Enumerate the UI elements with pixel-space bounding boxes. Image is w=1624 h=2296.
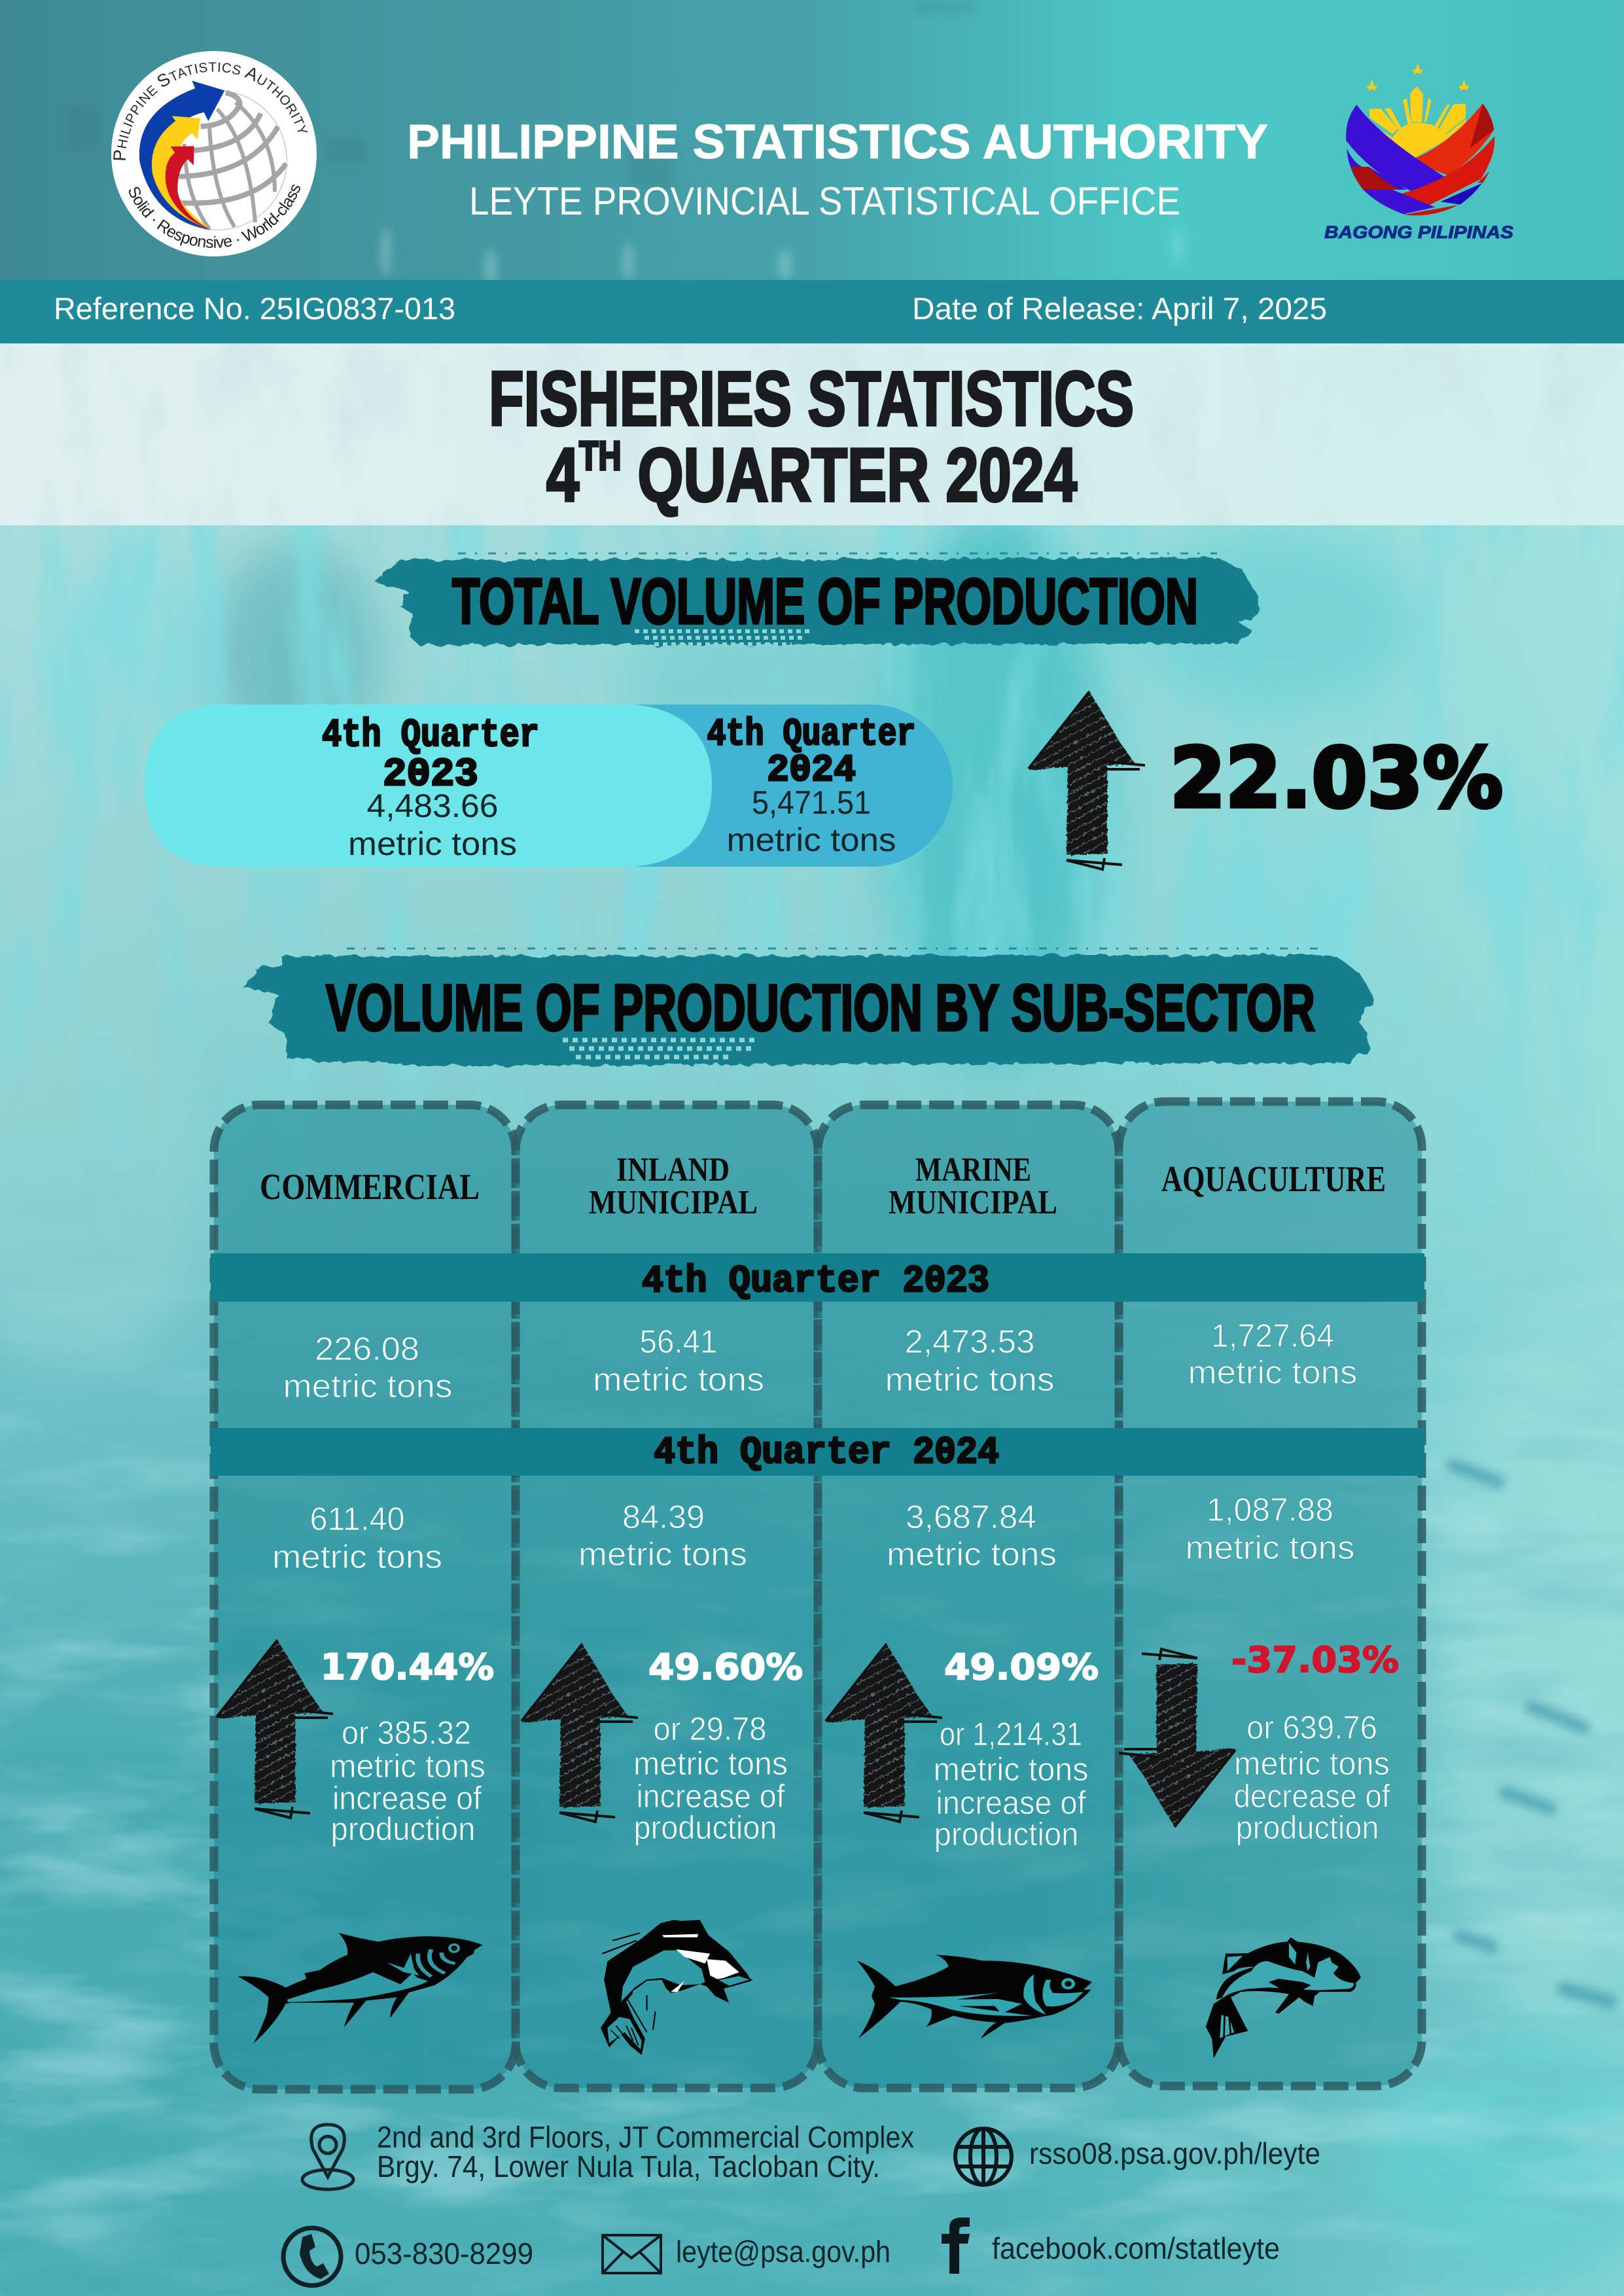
date of release: Date of Release: April 7, 2025	[912, 291, 1327, 326]
4th quarter 2024 value: 4th Quarter	[707, 714, 916, 756]
2024 value	[887, 1499, 1057, 1573]
logo: Philippine Statistics Authority seal: Solid · Responsive · World-class	[129, 184, 300, 248]
facebook address: facebook.com/statleyte	[992, 2231, 1280, 2265]
change description: or 385.32	[342, 1714, 471, 1751]
logo: Bagong Pilipinas	[1324, 63, 1513, 242]
title line 2: 4	[546, 432, 589, 517]
logo: Bagong Pilipinas: BAGONG PILIPINAS	[1324, 222, 1513, 242]
heading: COMMERCIAL	[260, 1167, 480, 1208]
change description: production	[934, 1816, 1078, 1852]
column: marine municipal	[826, 1151, 1099, 2039]
2024 value: metric tons	[578, 1536, 747, 1573]
4th quarter 2024 value	[707, 714, 916, 858]
change description: metric tons	[330, 1748, 485, 1784]
icon: phone	[283, 2228, 341, 2286]
logo: Philippine Statistics Authority seal: PHILIPPINE STATISTICS AUTHORITY	[113, 62, 308, 160]
change description: production	[633, 1809, 777, 1846]
arrow down	[1119, 1649, 1235, 1827]
main title	[489, 356, 1134, 517]
2024 value: metric tons	[272, 1539, 442, 1575]
2023 value	[885, 1323, 1055, 1398]
title line 2: TH	[579, 434, 621, 479]
total change percentage: 22.03%	[1170, 730, 1503, 826]
change description: metric tons	[1234, 1745, 1390, 1782]
2023 value: 56.41	[640, 1323, 717, 1360]
change description	[633, 1711, 788, 1846]
logo: Philippine Statistics Authority seal	[111, 51, 317, 256]
heading	[589, 1151, 758, 1221]
comparison pill: total production	[145, 704, 953, 867]
change description: increase of	[636, 1778, 785, 1815]
arrow up	[826, 1644, 942, 1822]
address: 2nd and 3rd Floors, JT Commercial Complex	[377, 2120, 914, 2154]
4th quarter 2023 value: 2023	[383, 753, 478, 797]
column: commercial	[217, 1167, 494, 2044]
4th quarter 2024 value: 2024	[767, 750, 856, 792]
title band background	[0, 343, 1624, 525]
change description: or 29.78	[653, 1711, 767, 1747]
2023 value: metric tons	[885, 1361, 1055, 1398]
icon: jumping fish	[601, 1920, 751, 2055]
arrow up	[217, 1640, 333, 1818]
title line 1: FISHERIES STATISTICS	[489, 356, 1134, 442]
icon: tuna	[238, 1933, 482, 2044]
2024 value: metric tons	[1186, 1529, 1354, 1566]
website: rsso08.psa.gov.ph/leyte	[1029, 2136, 1320, 2170]
2023 value: 1,727.64	[1211, 1317, 1334, 1354]
change description	[933, 1716, 1089, 1852]
heading: MUNICIPAL	[889, 1184, 1057, 1221]
header background	[0, 0, 1624, 288]
2023 value: 2,473.53	[904, 1323, 1035, 1360]
2024 value	[1186, 1491, 1354, 1566]
change description: metric tons	[933, 1751, 1089, 1788]
2023 value: 226.08	[315, 1331, 419, 1367]
header subtitle: LEYTE PROVINCIAL STATISTICAL OFFICE	[469, 179, 1180, 223]
icon: location pin	[302, 2125, 353, 2189]
arrow up	[521, 1644, 638, 1822]
change description: production	[1235, 1809, 1379, 1846]
2024 value	[272, 1501, 442, 1575]
title line 2: QUARTER 2024	[621, 432, 1077, 517]
4th quarter 2023 value: 4,483.66	[366, 788, 499, 824]
heading: AQUACULTURE	[1161, 1159, 1386, 1200]
2023 value	[283, 1331, 453, 1404]
icon: big sketched up arrow	[1029, 691, 1145, 869]
percent change: 49.09%	[944, 1646, 1099, 1688]
change description: increase of	[936, 1784, 1086, 1821]
2024 value: 611.40	[310, 1501, 404, 1537]
change description: or 639.76	[1246, 1709, 1377, 1746]
4th quarter 2024 value: 5,471.51	[752, 784, 871, 821]
2024 value	[578, 1499, 747, 1573]
band: 4th quarter 2023: 4th Quarter 2023	[642, 1261, 989, 1303]
2024 value: 3,687.84	[906, 1499, 1036, 1535]
column panels	[214, 1102, 1422, 2089]
2024 value: 84.39	[622, 1499, 705, 1535]
icon: tuna	[857, 1955, 1092, 2039]
change description: metric tons	[633, 1745, 788, 1782]
phone number: 053-830-8299	[355, 2236, 533, 2270]
percent change: 49.60%	[648, 1646, 803, 1688]
2023 value: metric tons	[593, 1361, 764, 1398]
header title: PHILIPPINE STATISTICS AUTHORITY	[407, 114, 1268, 169]
section banner: volume by sub-sector	[243, 948, 1375, 1066]
heading: MUNICIPAL	[589, 1184, 758, 1221]
4th quarter 2023 value	[322, 714, 539, 862]
band: 4th quarter 2024: 4th Quarter 2024	[654, 1432, 999, 1474]
4th quarter 2023 value: metric tons	[348, 826, 517, 862]
icon: globe	[955, 2129, 1012, 2185]
2024 value: metric tons	[887, 1536, 1057, 1573]
percent change: -37.03%	[1231, 1639, 1399, 1680]
2024 value: 1,087.88	[1207, 1491, 1333, 1528]
footer: contact details	[283, 2120, 1320, 2286]
change description: increase of	[332, 1780, 482, 1817]
percent change: 170.44%	[321, 1646, 494, 1688]
section banner: total volume of production	[376, 553, 1260, 645]
email: leyte@psa.gov.ph	[676, 2235, 891, 2269]
background: teal underwater texture	[0, 504, 1624, 2296]
address	[377, 2120, 914, 2183]
2023 value	[593, 1323, 764, 1398]
icon: facebook f	[942, 2218, 970, 2274]
heading: INLAND	[616, 1151, 730, 1189]
heading: MARINE	[915, 1151, 1031, 1189]
2023 value	[1188, 1317, 1357, 1391]
4th quarter 2023 value: 4th Quarter	[322, 714, 539, 758]
column: aquaculture	[1119, 1159, 1399, 2059]
icon: leaping fish	[1206, 1938, 1361, 2059]
2023 value: metric tons	[283, 1368, 453, 1404]
address: Brgy. 74, Lower Nula Tula, Tacloban City.	[377, 2149, 880, 2183]
4th quarter 2024 value: metric tons	[726, 822, 896, 858]
change description	[1234, 1709, 1390, 1846]
2023 value: metric tons	[1188, 1354, 1357, 1391]
change description: decrease of	[1234, 1778, 1390, 1815]
reference number: Reference No. 25IG0837-013	[54, 291, 455, 326]
band: 4th quarter 2024	[211, 1428, 1424, 1476]
banner heading: TOTAL VOLUME OF PRODUCTION	[452, 565, 1198, 637]
icon: envelope	[603, 2235, 661, 2273]
band: 4th quarter 2023	[211, 1253, 1424, 1303]
heading	[889, 1151, 1057, 1221]
change description: production	[331, 1811, 475, 1847]
change description: or 1,214.31	[940, 1716, 1082, 1752]
column: inland municipal	[521, 1151, 803, 2055]
change description	[330, 1714, 485, 1847]
reference and date band	[0, 280, 1624, 343]
panel: sub-sector table	[211, 1102, 1424, 2089]
